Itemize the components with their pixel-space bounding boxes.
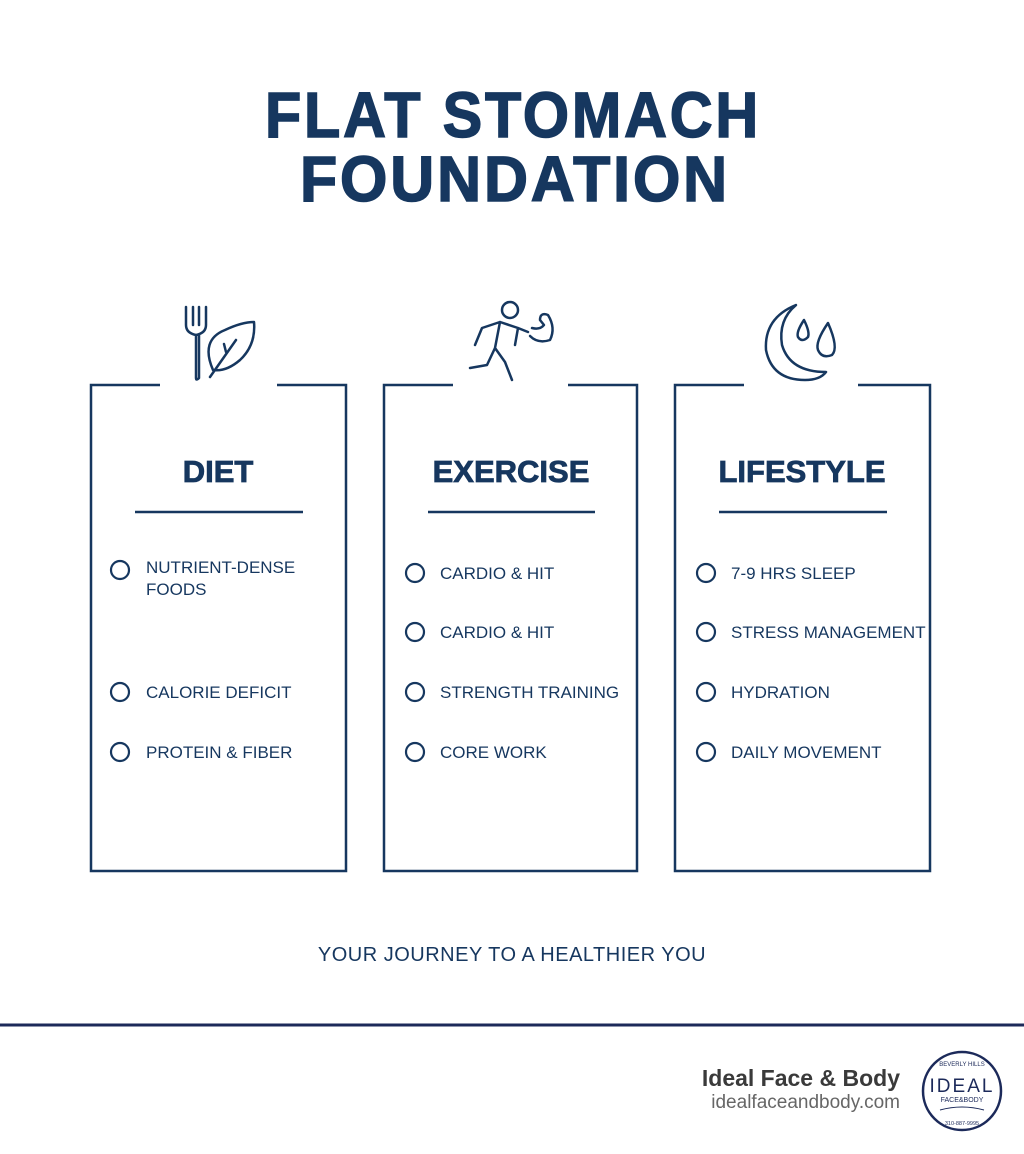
panel: diet: [91, 307, 346, 871]
list: diet: CALORIE DEFICIT: [146, 683, 291, 702]
heading: diet: DIET: [183, 454, 253, 489]
panel: lifestyle: [675, 305, 930, 871]
list: diet: NUTRIENT-DENSE: [146, 558, 295, 577]
footer brand text: Ideal Face & Body: [702, 1065, 900, 1091]
list: diet: [111, 558, 295, 762]
list: lifestyle: STRESS MANAGEMENT: [731, 623, 926, 642]
logo: [923, 1052, 1001, 1130]
list: lifestyle: 7-9 HRS SLEEP: [731, 564, 856, 583]
list: diet: PROTEIN & FIBER: [146, 743, 292, 762]
list: exercise: CARDIO & HIT: [440, 623, 554, 642]
list: diet: FOODS: [146, 580, 206, 599]
title: FLAT STOMACH: [265, 79, 761, 151]
list: lifestyle: DAILY MOVEMENT: [731, 743, 882, 762]
heading: exercise: EXERCISE: [433, 454, 589, 489]
logo: 310-887-9995: [945, 1121, 979, 1127]
title: [265, 79, 761, 215]
panel: exercise: [384, 302, 637, 871]
logo: BEVERLY HILLS: [939, 1062, 985, 1068]
tagline: YOUR JOURNEY TO A HEALTHIER YOU: [318, 944, 706, 966]
icon: runner: [470, 302, 553, 380]
logo: FACE&BODY: [941, 1097, 984, 1104]
icon: fork and leaf: [186, 307, 254, 380]
icon: moon and drops: [766, 305, 835, 380]
list: exercise: [406, 564, 619, 762]
list: exercise: CARDIO & HIT: [440, 564, 554, 583]
footer brand text: idealfaceandbody.com: [711, 1092, 900, 1113]
list: lifestyle: HYDRATION: [731, 683, 830, 702]
title: FOUNDATION: [300, 143, 730, 215]
logo: IDEAL: [930, 1076, 994, 1097]
heading: lifestyle: LIFESTYLE: [718, 454, 886, 489]
list: exercise: STRENGTH TRAINING: [440, 683, 619, 702]
list: exercise: CORE WORK: [440, 743, 547, 762]
list: lifestyle: [697, 564, 926, 762]
footer brand text: [702, 1065, 900, 1113]
